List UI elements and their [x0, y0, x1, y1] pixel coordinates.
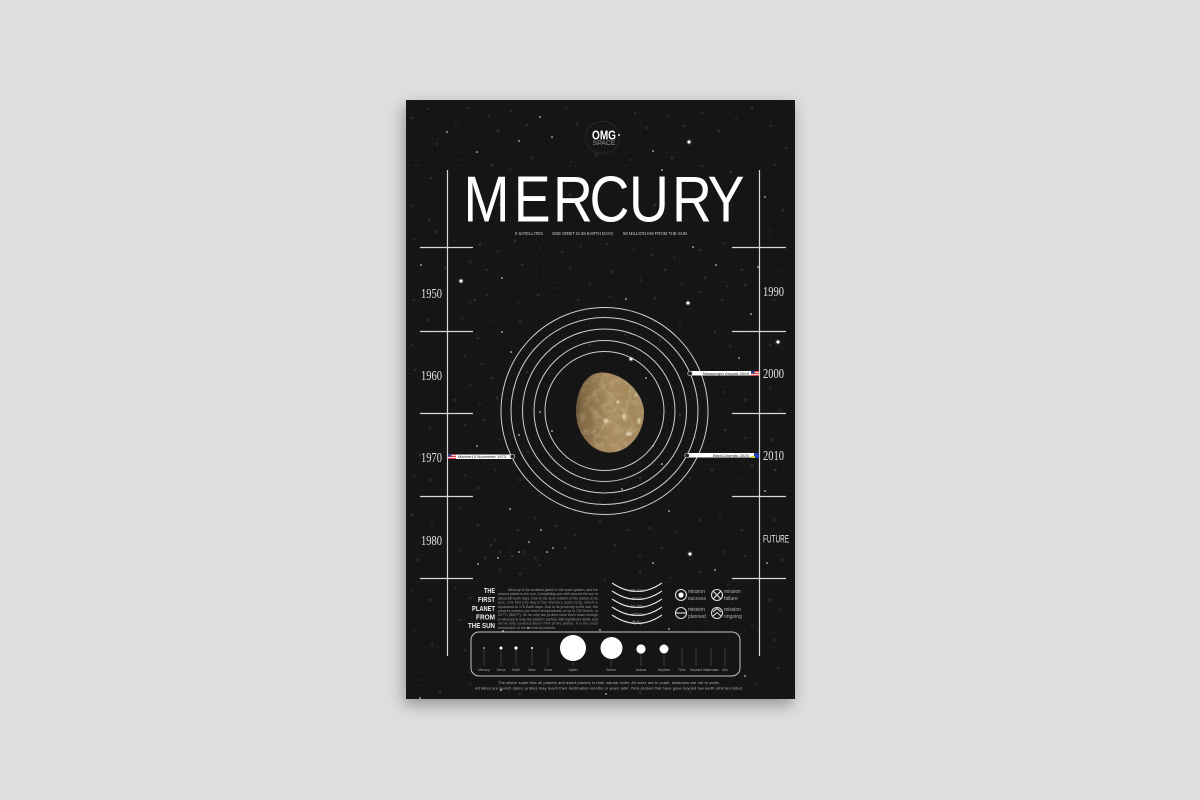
year labels left: 1970: [421, 451, 442, 466]
heading: the first planet from the sun: FROM: [476, 614, 495, 622]
planet names: Mars: [528, 668, 536, 672]
description text: axis, one Mercury day is two Mercury years long, which is: [498, 601, 598, 605]
description text: equivalent to 176 Earth days. Due to its proximity to the sun, the: [498, 605, 598, 609]
poster mockup: [396, 98, 802, 714]
title: MERCURY: [464, 162, 744, 236]
heading: the first planet from the sun: FIRST: [478, 597, 496, 604]
legend: mission status: planned: [688, 614, 706, 620]
planet names: [478, 668, 728, 672]
legend: mission types: orbiter: [631, 612, 644, 617]
planet scale panel: [471, 632, 740, 676]
legend: mission status: failure: [724, 596, 738, 602]
mission: Mariner 10: Mariner10 November 1973: [458, 455, 506, 459]
icon: mission ongoing: [712, 608, 722, 618]
mission: BepiColombo: BepiColombo 2020: [713, 454, 749, 458]
planet names: Makemake: [703, 668, 719, 672]
planet names: Saturn: [606, 668, 616, 672]
planet facts: 0 SATELLITES: [515, 231, 543, 236]
icon: mission planned: [676, 608, 686, 618]
planet names: Pluto: [678, 668, 686, 672]
planet names: Haumea: [690, 668, 702, 672]
year labels right: 2000: [763, 367, 784, 382]
logo: OMG Space: [586, 122, 620, 154]
heading: the first planet from the sun: THE: [484, 588, 495, 595]
flag: USA: [751, 371, 759, 376]
planets to scale: [483, 635, 668, 661]
planet Mercury: [576, 372, 644, 452]
legend: mission status: ongoing: [724, 614, 742, 620]
year labels left: 1980: [421, 534, 442, 549]
description text: 427°C (800°F). So far only two probes have been close enough: [498, 613, 598, 617]
footnote: The above scale lists all planets and dwarf planets in their natural order. All sizes are to scale, distances are not to scale.: [498, 680, 720, 685]
heading: the first planet from the sun: PLANET: [472, 606, 496, 613]
planet names: Mercury: [478, 668, 490, 672]
legend: mission status: [676, 589, 742, 620]
description text: closest planet to the sun. Completing one orbit around the sun in: [498, 592, 598, 596]
year labels right: 2010: [763, 449, 784, 464]
poster sheet: [406, 100, 795, 699]
description text: about 88 Earth days. Due to the slow rotation of the planet on its: [498, 596, 598, 600]
footnote: [475, 680, 743, 690]
planet facts: 58 MILLION KM FROM THE SUN: [623, 231, 687, 236]
mission: BepiColombo: [685, 453, 759, 458]
mission: Messenger: [688, 371, 759, 376]
planet facts: [515, 231, 687, 236]
icon: mission failure: [712, 590, 722, 600]
legend: mission status: success: [688, 596, 707, 602]
year labels left: 1960: [421, 369, 442, 384]
planet names: Eris: [722, 668, 728, 672]
planet facts: ONE ORBIT IS 88 EARTH DAYS: [552, 231, 613, 236]
legend: mission status: mission: [688, 607, 705, 613]
flag: Europe and Japan: [751, 453, 759, 458]
year labels right: 1990: [763, 285, 784, 300]
heading: the first planet from the sun: [468, 588, 496, 630]
planet names: Neptune: [658, 668, 670, 672]
planet names: Jupiter: [568, 668, 579, 672]
logo: OMG Space: OMG: [592, 128, 616, 142]
background grid: [406, 100, 795, 699]
description text: Mercury is the smallest planet in the solar system, and the: [508, 588, 598, 592]
year labels right: FUTURE: [763, 534, 789, 546]
star field: [412, 108, 786, 698]
heading: the first planet from the sun: THE SUN: [468, 623, 495, 630]
legend: mission types: [612, 583, 662, 625]
year labels left: 1950: [421, 287, 442, 302]
legend: mission status: mission: [688, 589, 705, 595]
flag: USA: [448, 454, 456, 459]
description text: we've only covered about 70% of the planet. It is the most: [498, 622, 598, 626]
planet names: Venus: [497, 668, 506, 672]
icon: mission success: [676, 590, 686, 600]
year labels left: [421, 287, 442, 549]
description text: remarkable of the terrestrial planets.: [498, 626, 556, 630]
year labels right: [763, 285, 789, 546]
planet names: Earth: [512, 668, 520, 672]
description text: to Mercury to map the planet's surface with significant detail, and: [498, 617, 598, 621]
footnote: All dates are launch dates; probes may reach their destination months or years later. Only probes that have gone beyond low earth orbit are listed.: [475, 686, 743, 690]
poster artwork: [406, 100, 789, 699]
timeline axis right: [732, 170, 786, 656]
description text: [498, 588, 599, 630]
legend: mission status: mission: [724, 589, 741, 595]
legend: mission types: returner: [629, 588, 645, 593]
orbit rings: [501, 308, 708, 514]
legend: mission types: lander: [631, 604, 644, 609]
mission: Messenger: Messenger August 2004: [703, 372, 749, 376]
description text: planet's surface can reach temperatures of up to 700 Kelvin, or: [498, 609, 599, 613]
logo: OMG Space: SPACE: [592, 140, 616, 147]
planet names: Uranus: [636, 668, 647, 672]
planet names: Ceres: [544, 668, 553, 672]
legend: mission types: flyby: [632, 620, 642, 625]
stems: [484, 648, 725, 666]
timeline axis left: [420, 170, 473, 656]
mission: Mariner 10: [448, 454, 515, 459]
legend: mission types: rover: [632, 596, 643, 601]
legend: mission status: mission: [724, 607, 741, 613]
